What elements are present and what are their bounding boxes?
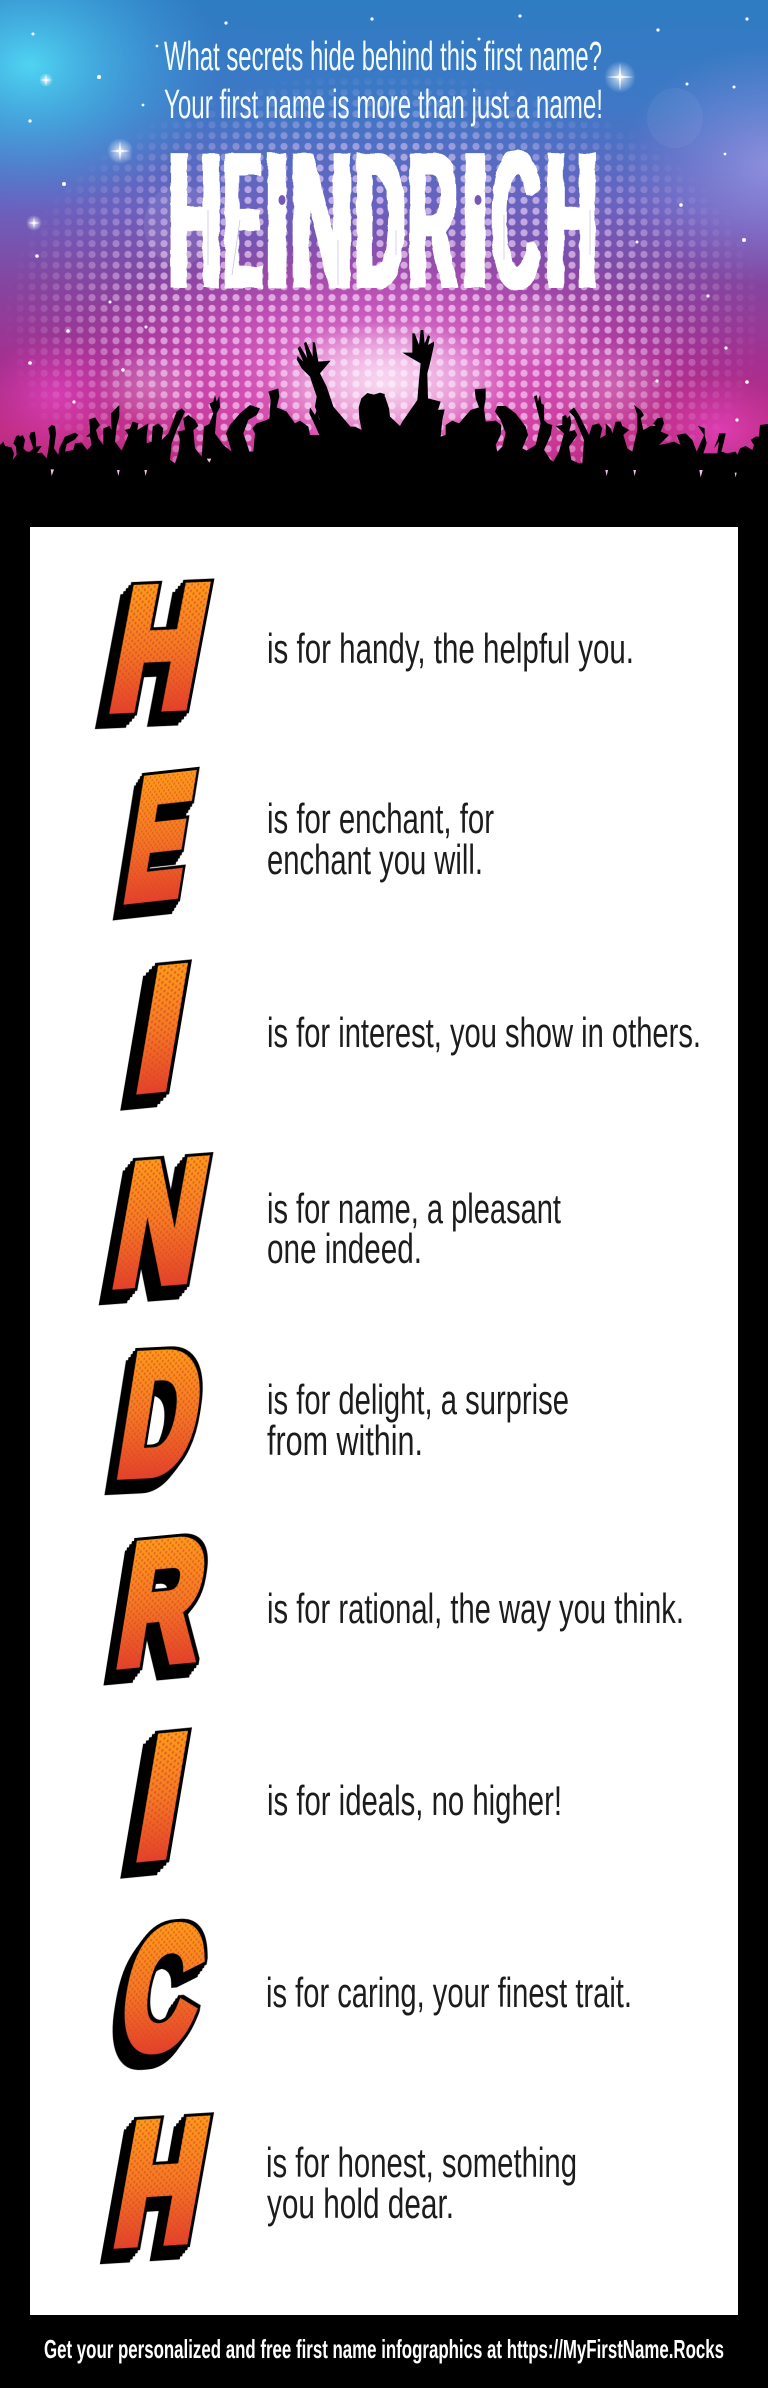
row: I [127,933,701,1126]
lines: delight: from within. [267,1417,423,1464]
crowd silhouette: right half [383,330,768,510]
row: H [100,551,634,745]
comic letter D: D [109,1317,214,1511]
lines: enchant: is for enchant, for [267,795,494,842]
title distress marks [208,195,590,285]
line: ideals: is for ideals, no higher! [267,1777,562,1824]
lines: honest: is for honest, something [266,2139,577,2186]
title: HEINDRICH: H [169,111,221,330]
title: HEINDRICH: N [290,111,353,330]
text: H [546,111,597,330]
title: HEINDRICH: D [355,111,404,330]
comic letter H: H [100,551,220,745]
lines: name [267,1185,561,1272]
row: H [104,2084,577,2279]
comic letter N: N [103,1124,219,1320]
panel: white letter list [30,527,738,2315]
row: D [109,1317,569,1511]
title: HEINDRICH: E [224,111,262,330]
lines: enchant: enchant you will. [267,836,483,883]
sparkles [26,14,749,422]
lines: name: one indeed. [267,1225,422,1272]
lines: honest: you hold dear. [267,2180,454,2227]
lines: enchant [267,795,494,883]
comic letter E: E [116,739,204,935]
row: N [103,1124,561,1320]
comic letter I: I [127,1701,197,1894]
lines: name: is for name, a pleasant [267,1185,561,1232]
comic letter I: I [127,933,197,1126]
row: E [116,739,494,935]
row: C [110,1892,632,2087]
title: HEINDRICH: C [492,111,540,330]
comic letter C: C [110,1892,216,2087]
title: HEINDRICH: I [265,111,289,330]
lines: honest [266,2139,577,2227]
title: HEINDRICH: I [461,111,489,330]
crowd silhouette: left half [0,342,385,510]
row: I [127,1701,562,1894]
lines: delight [267,1376,569,1464]
comic letter H: H [104,2084,220,2279]
row: R [108,1502,684,1701]
comic letter R: R [108,1502,217,1701]
header: concert background [0,0,768,510]
title: HEINDRICH: R [408,111,457,330]
lines: delight: is for delight, a surprise [267,1376,569,1423]
